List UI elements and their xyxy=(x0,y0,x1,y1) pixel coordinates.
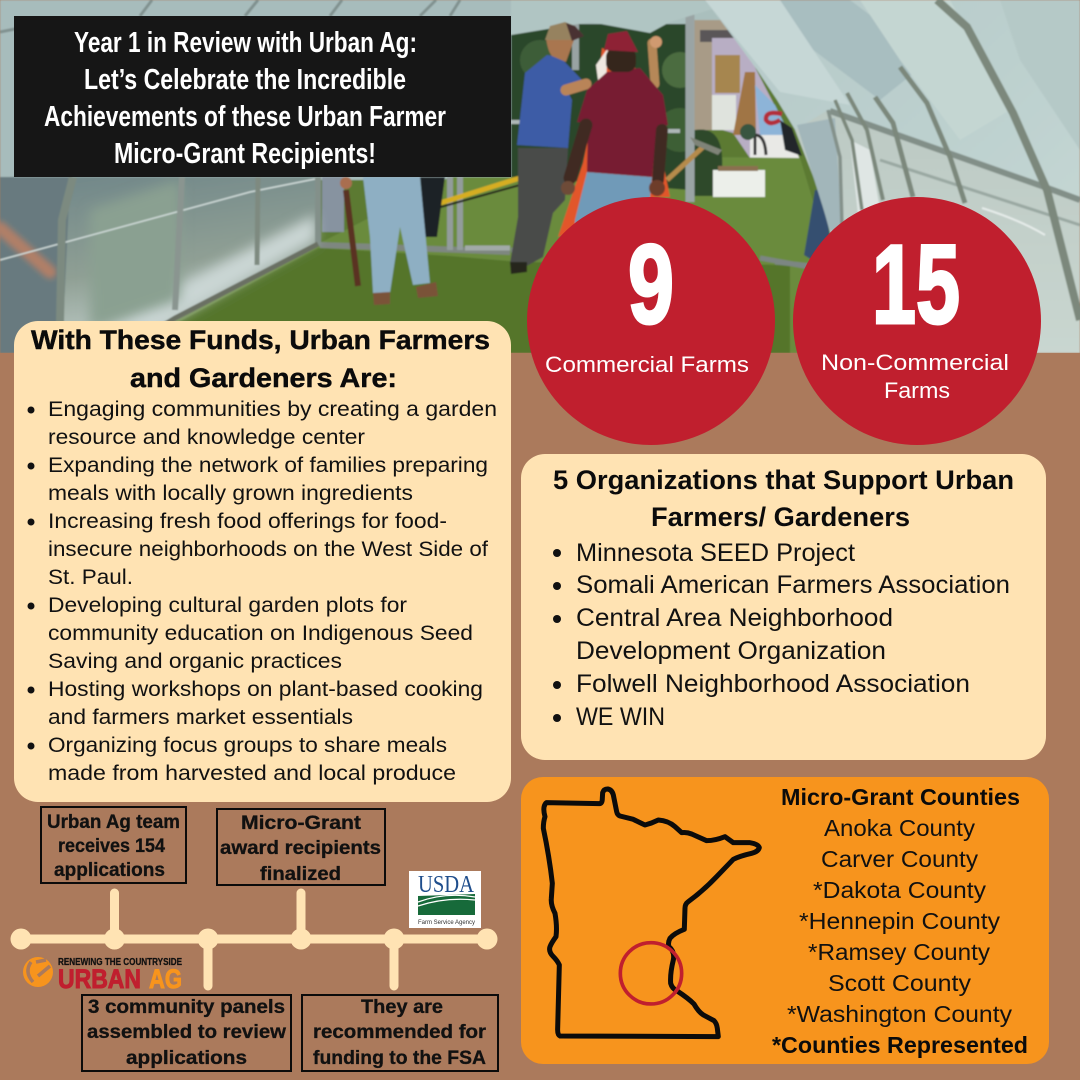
panel: 5 organizations xyxy=(521,454,1046,760)
right ribs xyxy=(937,0,1080,320)
dark legs xyxy=(420,177,445,237)
heading xyxy=(31,325,490,393)
timeline step: recipients finalized: award recipients xyxy=(220,838,381,859)
county list xyxy=(772,784,1028,1058)
logo: USDA Farm Service Agency: Farm Service Agency xyxy=(418,920,475,926)
timeline step: applications received: receives 154 xyxy=(58,836,165,857)
stat circle: 9 commercial farms: Commercial Farms xyxy=(545,352,749,377)
tree backdrop xyxy=(511,24,696,196)
stat circle: 15 non-commercial farms: 15 xyxy=(872,222,960,347)
county list: *Washington County xyxy=(787,1001,1013,1027)
logo: Renewing the Countryside Urban Ag: URBAN xyxy=(58,964,141,994)
heading: 5 Organizations that Support Urban xyxy=(553,465,1014,495)
stat circle: 9 commercial farms xyxy=(527,197,775,445)
county list: *Ramsey County xyxy=(808,939,991,965)
heading: Farmers/ Gardeners xyxy=(651,502,910,532)
title box: Year 1 in Review with Urban Ag: xyxy=(74,27,417,59)
hammer tool xyxy=(667,147,703,180)
heading: With These Funds, Urban Farmers xyxy=(31,325,490,355)
timeline step: community panels xyxy=(82,995,291,1071)
county list: Carver County xyxy=(821,846,979,872)
yellow lumber xyxy=(437,178,520,204)
timeline step: recommended to FSA xyxy=(302,995,498,1071)
timeline step: applications received: applications xyxy=(54,860,165,881)
stat circle: 15 non-commercial farms: Non-Commercial xyxy=(821,350,1009,375)
timeline step: recipients finalized: finalized xyxy=(260,864,341,885)
organization list: Development Organization xyxy=(576,637,886,665)
timeline step: community panels: 3 community panels xyxy=(88,997,285,1018)
bullet list: Organizing focus groups to share meals xyxy=(48,734,447,757)
stat circle: 15 non-commercial farms xyxy=(793,197,1041,445)
bullet list: community education on Indigenous Seed xyxy=(48,622,473,645)
orange cone xyxy=(558,48,670,237)
county list: Micro-Grant Counties xyxy=(781,784,1020,810)
bush and tools xyxy=(693,130,722,196)
bullet list: Saving and organic practices xyxy=(48,650,342,673)
logo: Renewing the Countryside Urban Ag xyxy=(23,956,182,994)
timeline step: recommended to FSA: recommended for xyxy=(313,1022,487,1043)
bullet list: Developing cultural garden plots for xyxy=(48,594,407,617)
logo: USDA Farm Service Agency: USDA xyxy=(418,872,475,898)
person behind plastic xyxy=(804,190,830,260)
heading: and Gardeners Are: xyxy=(130,363,397,393)
bullet list: Increasing fresh food offerings for food- xyxy=(48,510,447,533)
right roof plastic xyxy=(719,0,1080,234)
bullet list: insecure neighborhoods on the West Side of xyxy=(48,538,488,561)
top plastic edge xyxy=(511,0,716,35)
timeline step: community panels: applications xyxy=(126,1048,247,1069)
organization list: Minnesota SEED Project xyxy=(576,539,855,567)
timeline step: applications received xyxy=(41,807,186,883)
bullet list: resource and knowledge center xyxy=(48,426,365,449)
man in maroon shirt xyxy=(574,171,654,224)
panel: micro-grant counties xyxy=(521,777,1049,1064)
county list: Scott County xyxy=(828,970,972,996)
bullet list: St. Paul. xyxy=(48,566,133,589)
logo: Renewing the Countryside Urban Ag: RENEWING THE COUNTRYSIDE xyxy=(58,956,182,968)
panel: what funds do xyxy=(14,321,511,802)
background figure behind plastic door xyxy=(322,177,344,232)
right side wall xyxy=(794,113,1080,291)
bullet list: made from harvested and local produce xyxy=(48,762,456,785)
timeline step: applications received: Urban Ag team xyxy=(47,812,180,833)
man in blue shirt xyxy=(510,148,568,267)
top plastic of left side xyxy=(579,8,720,26)
grass xyxy=(190,156,814,353)
county list: *Counties Represented xyxy=(772,1032,1028,1058)
metro area highlight circle xyxy=(620,943,682,1004)
county list: Anoka County xyxy=(824,815,976,841)
person in jeans xyxy=(363,177,430,293)
icon: Minnesota outline map xyxy=(543,789,759,1037)
left plastic wall xyxy=(63,177,316,321)
county list: *Hennepin County xyxy=(799,908,1001,934)
bullet list: Hosting workshops on plant-based cooking xyxy=(48,678,483,701)
bullet list: Expanding the network of families preparing xyxy=(48,454,488,477)
photo: urban farmers in a hoop house xyxy=(0,0,1080,353)
stat circle: 15 non-commercial farms: Farms xyxy=(884,378,950,403)
organization list: Central Area Neighborhood xyxy=(576,604,893,632)
heading xyxy=(553,465,1014,532)
greenhouse frame xyxy=(574,0,577,70)
building and mural xyxy=(694,20,728,132)
stat circle: 9 commercial farms: 9 xyxy=(628,222,674,347)
timeline step: community panels: assembled to review xyxy=(87,1022,286,1043)
timeline step: recommended to FSA: They are xyxy=(361,997,443,1018)
logo: Renewing the Countryside Urban Ag: AG xyxy=(149,964,182,994)
timeline step: recommended to FSA: funding to the FSA xyxy=(313,1048,486,1069)
timeline step: recipients finalized xyxy=(217,809,385,885)
logo: USDA Farm Service Agency xyxy=(409,871,481,928)
organization list xyxy=(553,539,1010,731)
county list: *Dakota County xyxy=(813,877,987,903)
bullet list: Engaging communities by creating a garden xyxy=(48,398,497,421)
title box xyxy=(14,16,511,177)
organization list: Folwell Neighborhood Association xyxy=(576,670,970,698)
timeline step: recipients finalized: Micro-Grant xyxy=(241,813,362,834)
title box: Let’s Celebrate the Incredible xyxy=(84,64,406,96)
bullet list: and farmers market essentials xyxy=(48,706,353,729)
title box: Micro-Grant Recipients! xyxy=(114,138,376,170)
organization list: Somali American Farmers Association xyxy=(576,571,1010,599)
title box: Achievements of these Urban Farmer xyxy=(44,101,446,133)
timeline xyxy=(10,893,498,986)
organization list: WE WIN xyxy=(576,703,665,731)
bullet list xyxy=(28,398,497,785)
top ribs on left xyxy=(0,0,460,32)
bullet list: meals with locally grown ingredients xyxy=(48,482,413,505)
